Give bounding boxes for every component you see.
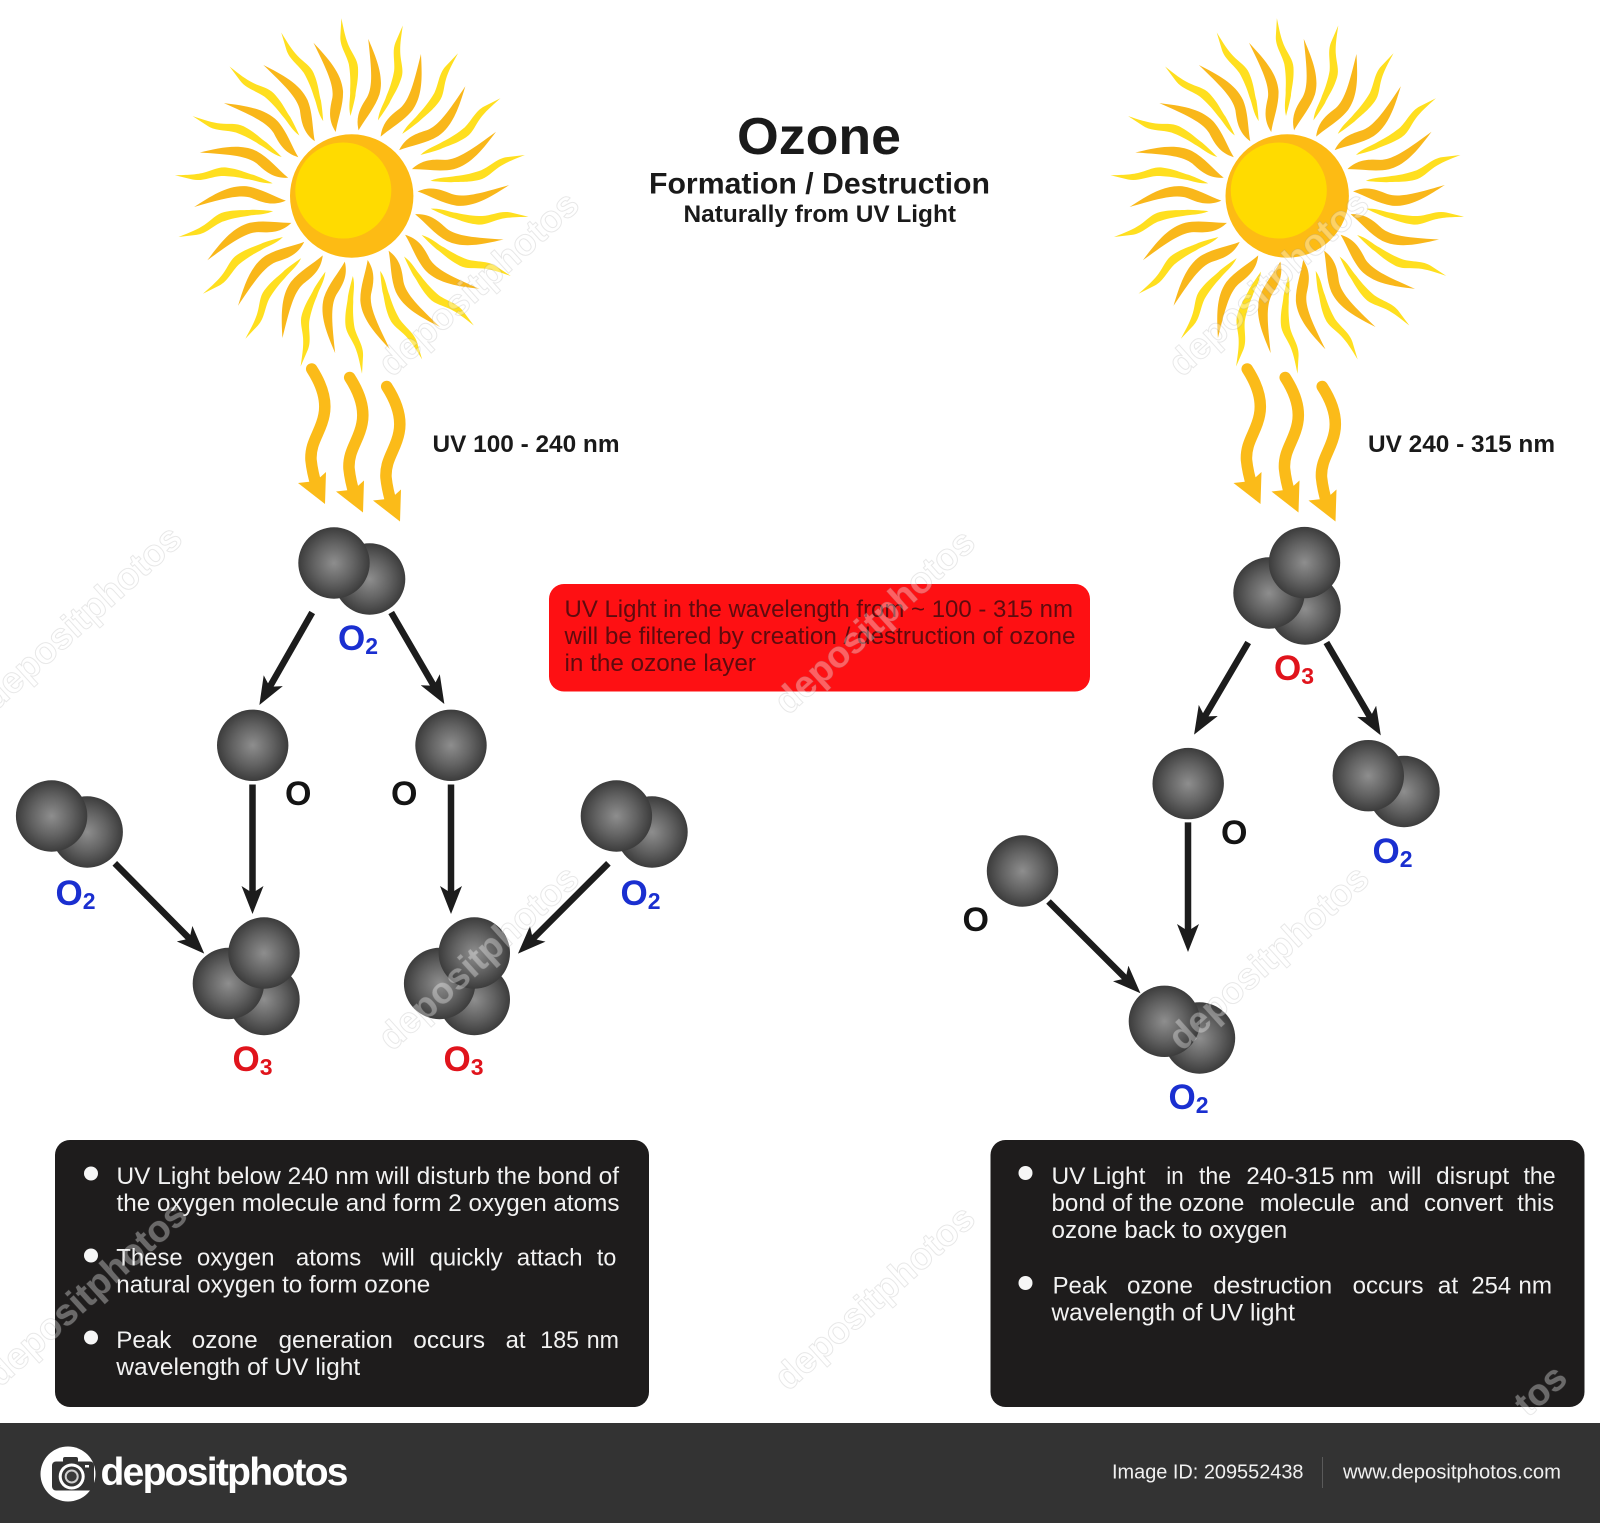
atom: O left bbox=[217, 710, 288, 781]
bullet: peak generation: wavelength of UV light bbox=[115, 1354, 361, 1381]
label: O2 bottom right: O bbox=[1168, 1078, 1196, 1117]
bullet: disrupt bond: convert bbox=[1424, 1190, 1503, 1217]
bullet: attach to oxygen: atoms bbox=[296, 1244, 361, 1272]
panel: formation notes bbox=[55, 1140, 649, 1407]
footer bar bbox=[0, 1423, 1600, 1523]
callout: red note: will be filtered by creation / destruction of ozone bbox=[563, 623, 1076, 650]
bullet: disrupt bond: UV Light bbox=[1052, 1163, 1146, 1190]
sun disc bbox=[290, 134, 413, 258]
label: O3 right: 3 bbox=[471, 1054, 484, 1080]
bullet: disrupt bond: molecule bbox=[1260, 1190, 1355, 1217]
bullet: disrupt bond: ozone back to oxygen bbox=[1052, 1217, 1287, 1244]
label: O2 top: 2 bbox=[365, 633, 378, 659]
bullet: peak generation: ozone bbox=[192, 1327, 258, 1354]
bullet: disrupt bond: the bbox=[1524, 1163, 1556, 1190]
panel: destruction notes bbox=[990, 1140, 1584, 1407]
callout: red note bbox=[549, 584, 1090, 692]
molecule: O2 far left bbox=[16, 780, 123, 868]
molecule: O3 right bbox=[404, 917, 510, 1035]
molecule: O2 far right bbox=[581, 780, 688, 868]
bullet: attach to oxygen: natural oxygen to form ozone bbox=[116, 1272, 430, 1298]
label: O2 bottom right: 2 bbox=[1196, 1092, 1209, 1118]
bullet: peak generation: occurs bbox=[413, 1327, 485, 1354]
bullet: peak destruction: ozone bbox=[1127, 1272, 1193, 1300]
bullet: peak destruction: at bbox=[1438, 1272, 1459, 1300]
bullet: attach to oxygen: These bbox=[116, 1244, 183, 1272]
label: UV range right: UV 240 - 315 nm bbox=[1368, 431, 1555, 458]
arrow: O down right panel bbox=[1185, 822, 1191, 934]
atom: O right panel bbox=[1152, 748, 1224, 819]
UV wavy arrows bbox=[298, 369, 401, 522]
icon: logo camera bbox=[40, 1446, 96, 1502]
bullet: attach to oxygen: oxygen bbox=[197, 1244, 274, 1272]
bullet: below 240 nm: UV Light below 240 nm will disturb the bond of bbox=[116, 1163, 619, 1190]
label: O2 right panel: 2 bbox=[1400, 846, 1413, 872]
bullet: peak destruction: nm bbox=[1518, 1272, 1552, 1300]
label: O left: O bbox=[285, 775, 311, 813]
watermarks: depositphotos bbox=[1160, 183, 1377, 384]
bullet: disrupt bond: the bbox=[1199, 1163, 1231, 1190]
callout: red note: UV Light in the wavelength from ~ 100 - 315 nm bbox=[564, 596, 1073, 623]
arrow: O to O2 bbox=[1048, 902, 1128, 980]
bullet: peak generation: nm bbox=[587, 1327, 619, 1354]
bullet: disrupt bond: nm bbox=[1342, 1163, 1374, 1190]
subtitle: Formation / Destruction bbox=[649, 168, 990, 200]
arrow: O2 to O3 left bbox=[115, 863, 192, 941]
bullet: disrupt bond: this bbox=[1517, 1190, 1554, 1217]
atom: O right bbox=[415, 710, 487, 781]
bullet: peak generation: at bbox=[506, 1327, 526, 1354]
bullet: attach to oxygen: to bbox=[597, 1244, 616, 1272]
bullet: attach to oxygen: quickly bbox=[430, 1244, 503, 1272]
image id: Image ID: 209552438 bbox=[1112, 1462, 1304, 1484]
arrow: O2 to O left bbox=[268, 612, 312, 689]
molecule: O3 left bbox=[193, 917, 300, 1035]
label: O2 top: O bbox=[338, 619, 365, 658]
website: www.depositphotos.com bbox=[1342, 1462, 1561, 1484]
arrow: O2 to O right bbox=[391, 612, 435, 688]
divider bbox=[1322, 1457, 1323, 1488]
atom: free O bbox=[987, 835, 1058, 907]
bullet: below 240 nm bbox=[84, 1163, 620, 1217]
arrow: O2 to O3 right bbox=[531, 863, 608, 941]
label: UV range left: UV 100 - 240 nm bbox=[432, 431, 620, 458]
label: free O: O bbox=[962, 901, 989, 939]
watermarks: depositphotos bbox=[766, 521, 983, 722]
label: O2 far right: 2 bbox=[648, 888, 661, 914]
bullet: peak destruction: wavelength of UV light bbox=[1050, 1300, 1295, 1326]
bullet: peak destruction bbox=[1018, 1272, 1552, 1326]
molecule: O2 bottom right bbox=[1129, 986, 1235, 1074]
icon: sun and UV rays, right bbox=[1110, 18, 1464, 522]
arrow: O3 to O2 bbox=[1326, 642, 1372, 720]
bullet: peak generation: Peak bbox=[116, 1327, 172, 1354]
molecule: O3 top right bbox=[1233, 527, 1341, 645]
molecule: O2 top left bbox=[298, 527, 405, 615]
callout: red note: in the ozone layer bbox=[564, 650, 756, 677]
watermarks: tos bbox=[1506, 1356, 1575, 1424]
watermarks: depositphotos bbox=[1160, 857, 1377, 1058]
bullet: disrupt bond: in bbox=[1166, 1163, 1184, 1190]
label: O3 right: O bbox=[444, 1040, 471, 1079]
sun rays bbox=[175, 18, 529, 374]
label: O right: O bbox=[391, 775, 417, 813]
bullet: attach to oxygen: will bbox=[381, 1244, 415, 1272]
bullet: disrupt bond: bond of the bbox=[1052, 1190, 1172, 1217]
logo wordmark: depositphotos bbox=[100, 1451, 348, 1494]
watermarks: depositphotos bbox=[370, 183, 587, 384]
sub-subtitle: Naturally from UV Light bbox=[684, 201, 956, 228]
watermarks: depositphotos bbox=[370, 857, 587, 1058]
label: O2 far left: 2 bbox=[83, 888, 96, 914]
bullet: peak generation: generation bbox=[279, 1327, 393, 1354]
bullet: disrupt bond: will bbox=[1388, 1163, 1421, 1190]
label: O3 top right: O bbox=[1274, 649, 1301, 688]
bullet: attach to oxygen: attach bbox=[517, 1244, 583, 1272]
label: O2 far left: O bbox=[56, 874, 83, 913]
bullet: disrupt bond: ozone bbox=[1179, 1190, 1244, 1217]
bullet: peak generation: 185 bbox=[540, 1327, 579, 1354]
molecule: O2 right panel bbox=[1333, 740, 1440, 827]
label: O3 top right: 3 bbox=[1301, 663, 1314, 689]
bullet: disrupt bond: disrupt bbox=[1436, 1163, 1510, 1190]
arrow: O3 to O bbox=[1203, 642, 1248, 719]
icon: sun and UV rays, left bbox=[175, 18, 529, 522]
label: O3 left: 3 bbox=[260, 1054, 273, 1080]
label: O2 right panel: O bbox=[1372, 832, 1400, 871]
bullet: disrupt bond: and bbox=[1370, 1190, 1409, 1217]
label: O right panel: O bbox=[1221, 814, 1247, 852]
bullet: disrupt bond: 240-315 bbox=[1246, 1163, 1335, 1190]
bullet: attach to oxygen bbox=[84, 1244, 616, 1298]
bullet: peak generation bbox=[84, 1327, 619, 1381]
bullet: peak destruction: destruction bbox=[1213, 1272, 1332, 1300]
arrow: O down right bbox=[448, 784, 454, 896]
bullet: disrupt bond bbox=[1018, 1163, 1556, 1244]
label: O3 left: O bbox=[232, 1040, 260, 1079]
bullet: peak destruction: occurs bbox=[1353, 1272, 1424, 1300]
bullet: peak destruction: Peak bbox=[1053, 1272, 1108, 1300]
bullet: below 240 nm: the oxygen molecule and form 2 oxygen atoms bbox=[116, 1190, 620, 1217]
label: O2 far right: O bbox=[620, 874, 648, 913]
watermarks: depositphotos bbox=[766, 1197, 983, 1398]
bullet: peak destruction: 254 bbox=[1471, 1272, 1511, 1300]
title: Ozone bbox=[737, 108, 901, 166]
arrow: O down left bbox=[249, 784, 256, 896]
